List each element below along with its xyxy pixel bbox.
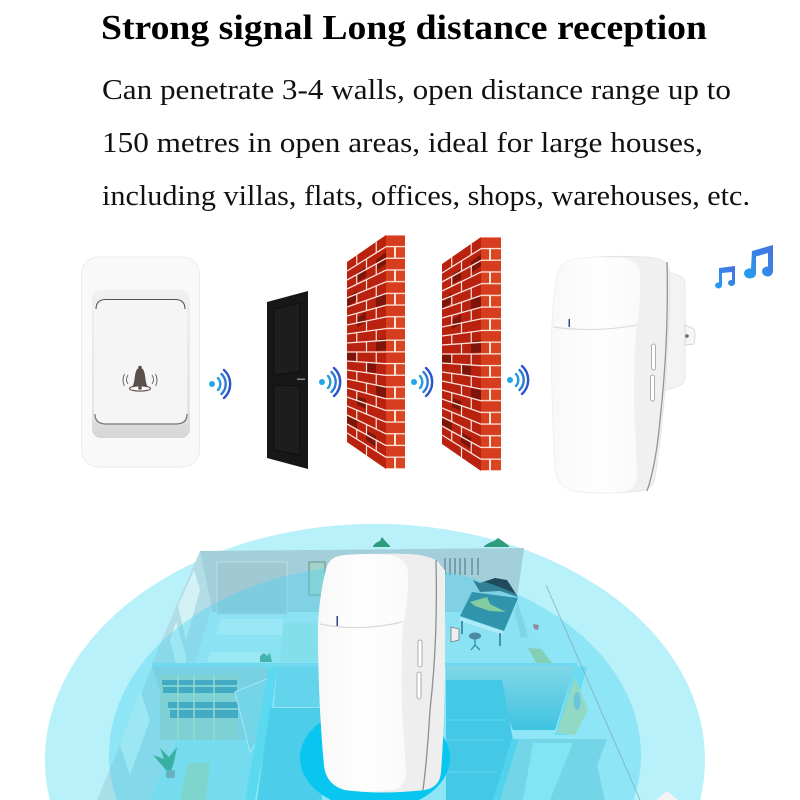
door [267, 291, 308, 469]
brick wall 2 [442, 237, 501, 471]
wall picture [309, 562, 325, 595]
beige wall poster [557, 677, 588, 735]
desk [180, 763, 210, 800]
large doorbell receiver [318, 554, 459, 792]
outer signal range [45, 524, 705, 800]
title: Strong signal Long distance reception [101, 8, 707, 47]
floor reflections [207, 619, 283, 662]
stool [469, 632, 481, 650]
floor plants [260, 653, 272, 662]
doorbell push button transmitter [82, 257, 200, 467]
icon: music notes [715, 245, 773, 288]
description text block: Can penetrate 3-4 walls, open distance range up to [102, 74, 731, 106]
plant top left [373, 537, 390, 547]
brick wall 1 [347, 235, 405, 469]
icon: bell [123, 366, 157, 391]
description text block [102, 74, 750, 212]
upper bedroom and piano room [152, 537, 552, 663]
flower and bench [533, 624, 539, 630]
radiator ticks [445, 558, 478, 575]
plant top right [484, 538, 509, 547]
potted plant [153, 747, 177, 778]
open door [235, 678, 269, 752]
side panel [515, 600, 528, 638]
bench [528, 648, 552, 663]
bookshelf [160, 675, 238, 740]
poster window [574, 692, 580, 710]
bed [280, 623, 318, 662]
icon: wireless signal 4 [507, 366, 528, 394]
description text block: including villas, flats, offices, shops, warehouses, etc. [102, 180, 750, 212]
description text block: 150 metres in open areas, ideal for large houses, [102, 127, 703, 159]
inner signal range [300, 706, 450, 800]
small white marker [656, 791, 678, 800]
doorbell receiver [552, 256, 695, 493]
icon: wireless signal 1 [209, 370, 230, 398]
icon: wireless signal 3 [411, 368, 432, 396]
middle signal range [109, 565, 641, 800]
wardrobe [217, 562, 287, 614]
piano [460, 578, 518, 646]
lower rooms [97, 663, 607, 800]
floor plan coverage illustration [45, 524, 705, 800]
icon: wireless signal 2 [319, 368, 340, 396]
